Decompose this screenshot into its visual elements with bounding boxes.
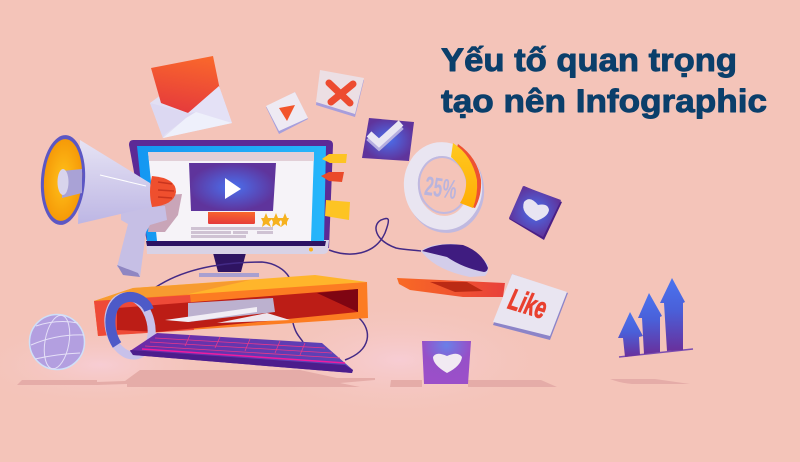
mousepad — [397, 278, 505, 297]
donut inner edge — [415, 154, 471, 216]
play icon — [225, 178, 241, 199]
icon: check card — [362, 118, 414, 161]
shelf interior — [117, 289, 358, 332]
video player — [189, 163, 276, 211]
floor shadows — [17, 370, 690, 387]
megaphone bell — [38, 134, 88, 226]
title line 1: Yếu tố quan trọng — [441, 42, 737, 78]
led — [309, 248, 313, 252]
icon: heart card tilted — [509, 186, 562, 240]
icon: heart card bottom — [422, 341, 471, 384]
icon: cross card — [316, 70, 364, 117]
growth arrows — [618, 278, 693, 357]
megaphone cone — [78, 140, 155, 224]
icon: play card — [266, 92, 308, 134]
envelope icon — [150, 56, 232, 138]
shelf front — [94, 282, 368, 336]
text lines — [191, 227, 273, 238]
window — [148, 152, 314, 241]
stars — [261, 213, 289, 227]
donut shadow ring — [408, 148, 482, 230]
arrows baseline — [619, 349, 693, 357]
arrow large — [660, 278, 685, 351]
donut yellow segment — [451, 143, 477, 208]
floor glow — [0, 295, 570, 425]
globe — [29, 313, 85, 371]
donut grey ring — [406, 145, 480, 227]
donut red edge — [456, 144, 481, 208]
cables — [156, 218, 421, 360]
mouse — [421, 244, 488, 277]
megaphone shadow — [148, 194, 182, 232]
orange collar — [150, 176, 176, 207]
keyboard — [130, 333, 353, 373]
megaphone driver — [62, 169, 82, 198]
donut label: 25% — [423, 171, 459, 205]
screen — [137, 146, 326, 241]
envelope front flaps — [150, 103, 195, 138]
arrow small — [618, 312, 643, 357]
title — [441, 42, 767, 119]
tabs — [322, 154, 347, 163]
shelf — [94, 275, 368, 336]
headphones — [102, 292, 158, 360]
monitor stand — [213, 253, 246, 272]
megaphone — [38, 134, 182, 277]
envelope back — [150, 86, 232, 138]
button — [208, 212, 255, 224]
arrow medium — [638, 293, 662, 354]
letter — [151, 56, 220, 113]
donut chart: 25% — [406, 143, 482, 230]
like card — [493, 274, 568, 340]
like label: Like — [505, 283, 551, 326]
monitor frame — [129, 140, 333, 248]
title line 2: tạo nên Infographic — [441, 83, 767, 119]
keyboard body — [130, 333, 353, 373]
shelf top — [94, 275, 367, 305]
keyboard keys — [145, 335, 340, 358]
monitor — [129, 140, 350, 277]
laptop — [188, 298, 275, 322]
megaphone handle — [117, 206, 167, 277]
